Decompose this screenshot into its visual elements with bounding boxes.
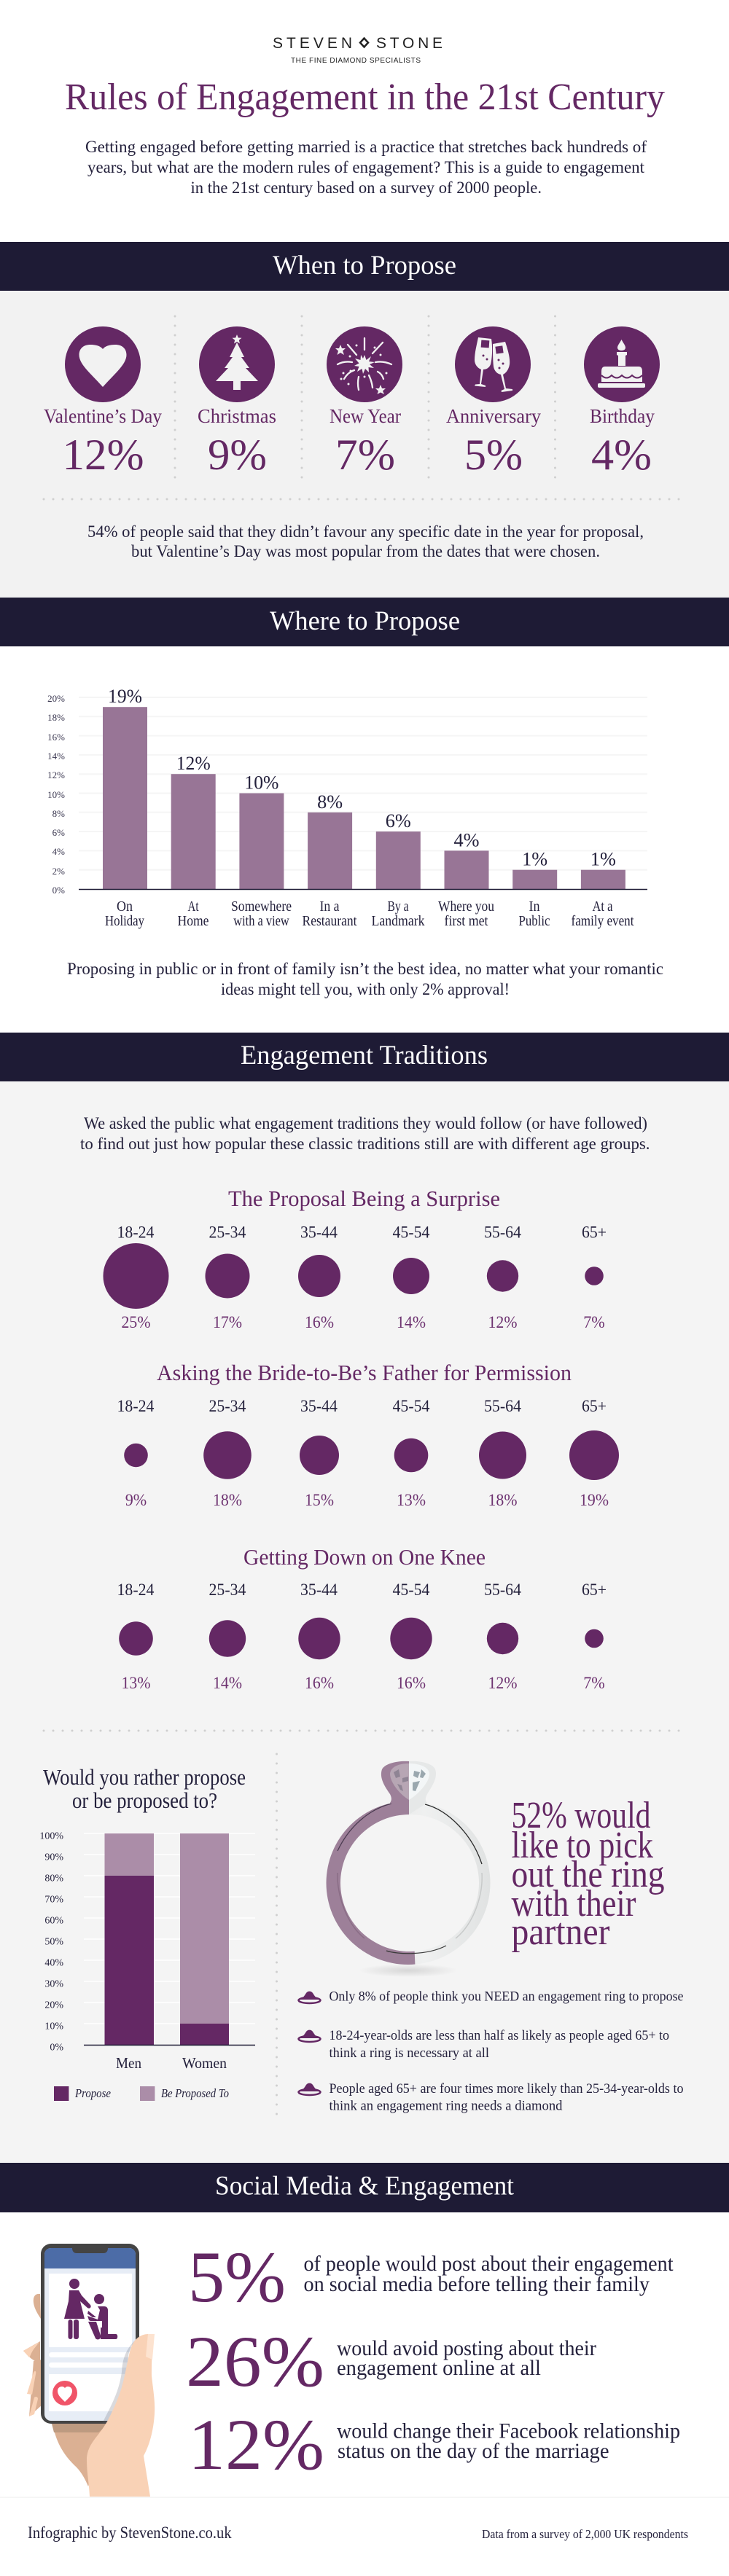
ring callout: partner — [512, 1911, 609, 1953]
bullet text: think a ring is necessary at all — [330, 2045, 489, 2061]
legend: Be Proposed To — [161, 2086, 229, 2100]
bullet icon — [299, 2030, 321, 2042]
bubble chart: proposal being a surprise: 16% — [305, 1313, 334, 1331]
bar chart: where to propose: 16% — [47, 732, 65, 743]
labels and values: 5% — [464, 431, 523, 479]
bubble chart: proposal being a surprise: 45-54 — [392, 1223, 430, 1242]
icon: birthday cake — [584, 326, 660, 402]
stacked bar chart: propose or be proposed to: 60% — [44, 1915, 63, 1927]
bubble chart: proposal being a surprise: 25-34 — [208, 1223, 246, 1242]
bubble chart: asking father for permission: 18% — [213, 1491, 242, 1509]
bullet text: Only 8% of people think you NEED an engagement ring to propose — [330, 1989, 684, 2004]
stat: 5 percent: 5% — [188, 2236, 286, 2317]
logo: STONE — [376, 35, 443, 52]
bubble chart: proposal being a surprise — [104, 1186, 607, 1331]
bubble chart: proposal being a surprise: 35-44 — [300, 1223, 338, 1242]
heading: when to propose — [0, 242, 729, 291]
intro text: years, but what are the modern rules of engagement? This is a guide to engagement — [87, 158, 645, 176]
ring callout: like to pick — [512, 1825, 653, 1866]
heading: social media and engagement — [0, 2163, 729, 2212]
bubble chart: getting down on one knee: 18-24 — [117, 1581, 155, 1599]
legend — [54, 2086, 229, 2101]
stacked bar chart: propose or be proposed to: or be proposed to? — [72, 1788, 217, 1813]
bar chart: where to propose: 12% — [47, 770, 65, 780]
icon: heart — [65, 326, 141, 402]
labels and values: Christmas — [198, 405, 276, 427]
logo: THE FINE DIAMOND SPECIALISTS — [291, 57, 421, 65]
when to propose note: 54% of people said that they didn’t favour any specific date in the year for proposal, — [87, 522, 644, 541]
stacked bar chart: propose or be proposed to: 20% — [44, 2000, 63, 2011]
bar chart: where to propose: In — [529, 899, 539, 915]
footer source: Data from a survey of 2,000 UK respondents — [482, 2527, 688, 2541]
bubble chart: asking father for permission: 9% — [125, 1491, 147, 1509]
bar chart: where to propose: Where you — [438, 899, 494, 915]
bubble chart: asking father for permission: 15% — [305, 1491, 334, 1509]
bubble chart: getting down on one knee: 16% — [397, 1674, 426, 1692]
phone — [41, 2244, 139, 2424]
bar chart: where to propose: 8% — [317, 791, 343, 813]
stacked bar chart: propose or be proposed to: Would you rather propose — [43, 1764, 246, 1790]
bubble chart: asking father for permission: 13% — [397, 1491, 426, 1509]
bubble chart: asking father for permission — [117, 1360, 619, 1509]
stacked bar chart: propose or be proposed to: 50% — [44, 1937, 63, 1947]
labels and values: 12% — [63, 431, 144, 479]
bubble chart: proposal being a surprise: 65+ — [582, 1223, 607, 1242]
icon: like heart — [52, 2381, 77, 2405]
bar chart: where to propose: In a — [319, 899, 340, 915]
stat: 12 percent — [188, 2404, 680, 2485]
bubble chart: getting down on one knee: 65+ — [582, 1581, 607, 1599]
logo — [273, 35, 443, 65]
bubble chart: proposal being a surprise: 25% — [121, 1313, 150, 1331]
bar chart: where to propose: 2% — [52, 866, 65, 877]
when to propose note — [87, 522, 644, 560]
bullet text — [330, 2028, 669, 2061]
traditions intro: We asked the public what engagement traditions they would follow (or have followed) — [84, 1114, 647, 1132]
ring illustration — [327, 1761, 490, 1977]
heading: when to propose: When to Propose — [273, 251, 456, 281]
stat: 26 percent: engagement online at all — [337, 2356, 541, 2380]
bubble chart: getting down on one knee: 13% — [121, 1674, 150, 1692]
bar chart: where to propose: 12% — [176, 753, 211, 774]
bar chart: where to propose: 4% — [52, 846, 65, 857]
bar chart: where to propose: At — [188, 899, 199, 915]
bubble chart: getting down on one knee: 35-44 — [300, 1581, 338, 1599]
ring callout: with their — [512, 1883, 636, 1925]
ring callout — [512, 1795, 665, 1953]
heading: engagement traditions — [0, 1033, 729, 1081]
bullet icon — [299, 2083, 321, 2095]
icon: hand holding phone — [23, 2244, 155, 2497]
stat: 5 percent: of people would post about their engagement — [303, 2252, 674, 2276]
bullet text: People aged 65+ are four times more likely than 25-34-year-olds to — [330, 2081, 684, 2097]
labels and values: 4% — [591, 431, 652, 479]
labels and values — [44, 405, 655, 479]
bubble chart: proposal being a surprise: 12% — [488, 1313, 518, 1331]
bar chart: where to propose: family event — [572, 913, 634, 929]
stat: 12 percent: status on the day of the marriage — [338, 2439, 609, 2463]
bar chart: where to propose: By a — [388, 899, 409, 915]
when to propose note: but Valentine’s Day was most popular from the dates that were chosen. — [131, 542, 600, 560]
bubble chart: getting down on one knee — [117, 1544, 607, 1692]
bubble chart: asking father for permission: 45-54 — [392, 1397, 430, 1415]
stacked bar chart: propose or be proposed to: 100% — [39, 1831, 63, 1842]
bubble chart: proposal being a surprise: 55-64 — [484, 1223, 521, 1242]
heading: social media and engagement: Social Media & Engagement — [215, 2172, 515, 2201]
stacked bar chart: propose or be proposed to: 0% — [50, 2042, 63, 2054]
bubble chart: asking father for permission: Asking the Bride-to-Be’s Father for Permission — [157, 1360, 572, 1385]
bubble chart: getting down on one knee: 14% — [213, 1674, 242, 1692]
bar chart: where to propose: 1% — [590, 849, 616, 870]
bubble chart: getting down on one knee: 25-34 — [208, 1581, 246, 1599]
bubble chart: getting down on one knee: 7% — [583, 1674, 605, 1692]
bubble chart: proposal being a surprise: 18-24 — [117, 1223, 155, 1242]
bar chart: where to propose: 19% — [108, 686, 142, 707]
logo: STEVEN — [273, 35, 352, 52]
bar chart: where to propose: Holiday — [105, 913, 144, 929]
intro text: in the 21st century based on a survey of 2000 people. — [191, 179, 542, 197]
labels and values: Anniversary — [446, 405, 541, 427]
bar chart: where to propose: with a view — [233, 913, 289, 929]
stacked bar chart: propose or be proposed to: 10% — [44, 2021, 63, 2032]
bar chart: where to propose: 10% — [47, 789, 65, 800]
bubble chart: proposal being a surprise: The Proposal Being a Surprise — [228, 1186, 500, 1211]
ring callout: out the ring — [512, 1854, 665, 1895]
bar chart: where to propose — [47, 686, 647, 929]
bubble chart: asking father for permission: 25-34 — [208, 1397, 246, 1415]
stacked bar chart: propose or be proposed to — [39, 1764, 255, 2101]
legend: Propose — [74, 2086, 111, 2100]
panel: when to propose — [0, 242, 729, 598]
bubble chart: getting down on one knee: 16% — [305, 1674, 334, 1692]
bar chart: where to propose: On — [117, 899, 133, 915]
bar chart: where to propose: Landmark — [372, 913, 424, 929]
bar chart: where to propose: Public — [519, 913, 550, 929]
stat: 26 percent — [186, 2321, 596, 2402]
bar chart: where to propose: 14% — [47, 751, 65, 762]
bubble chart: asking father for permission: 65+ — [582, 1397, 607, 1415]
traditions intro: to find out just how popular these classic traditions still are with different age groups. — [80, 1135, 650, 1153]
bubble chart: getting down on one knee: 45-54 — [392, 1581, 430, 1599]
labels and values: 7% — [335, 431, 395, 479]
stat: 12 percent: 12% — [188, 2404, 324, 2485]
bullet list — [299, 1989, 684, 2113]
footer credit: Infographic by StevenStone.co.uk — [28, 2524, 232, 2542]
bubble chart: getting down on one knee: Getting Down on One Knee — [243, 1544, 486, 1570]
heading: where to propose: Where to Propose — [270, 606, 460, 636]
bar chart: where to propose: Restaurant — [302, 913, 357, 929]
bubble chart: asking father for permission: 55-64 — [484, 1397, 521, 1415]
labels and values: Valentine’s Day — [44, 405, 162, 427]
bubble chart: proposal being a surprise: 14% — [397, 1313, 426, 1331]
bubble chart: getting down on one knee: 55-64 — [484, 1581, 521, 1599]
stat: 26 percent: would avoid posting about their — [337, 2336, 596, 2360]
where to propose note — [67, 960, 663, 998]
bar chart: where to propose: Home — [178, 913, 209, 929]
where to propose note: ideas might tell you, with only 2% approval! — [221, 980, 510, 998]
bar chart: where to propose: 6% — [52, 827, 65, 838]
bar chart: where to propose: 0% — [52, 885, 65, 896]
panel: engagement traditions — [0, 1033, 729, 2163]
bubble chart: asking father for permission: 19% — [580, 1491, 609, 1509]
bubble chart: proposal being a surprise: 7% — [583, 1313, 605, 1331]
title: Rules of Engagement in the 21st Century — [65, 77, 665, 118]
bar chart: where to propose: 1% — [522, 849, 547, 870]
where to propose note: Proposing in public or in front of family isn’t the best idea, no matter what your romantic — [67, 960, 663, 978]
stacked bar chart: propose or be proposed to: 30% — [44, 1979, 63, 1989]
heading: engagement traditions: Engagement Traditions — [241, 1041, 488, 1070]
heading: where to propose — [0, 598, 729, 646]
traditions intro — [80, 1114, 650, 1153]
bubble chart: asking father for permission: 18-24 — [117, 1397, 155, 1415]
bar chart: where to propose: 20% — [47, 693, 65, 704]
bubble chart: proposal being a surprise: 17% — [213, 1313, 242, 1331]
bullet text: 18-24-year-olds are less than half as likely as people aged 65+ to — [330, 2028, 669, 2043]
bullet text — [330, 2081, 684, 2113]
stacked bar chart: propose or be proposed to: 90% — [44, 1852, 63, 1863]
bubble chart: getting down on one knee: 12% — [488, 1674, 518, 1692]
intro text: Getting engaged before getting married is a practice that stretches back hundreds of — [85, 138, 647, 156]
stat: 12 percent: would change their Facebook relationship — [337, 2419, 680, 2443]
stat: 26 percent: 26% — [186, 2321, 324, 2402]
icon: fireworks — [327, 326, 402, 402]
stat: 5 percent: on social media before telling their family — [303, 2272, 650, 2296]
bullet icon — [299, 1992, 321, 2003]
bar chart: where to propose: 6% — [386, 810, 411, 831]
bar chart: where to propose: 4% — [453, 829, 480, 850]
labels and values: Birthday — [590, 405, 655, 427]
bubble chart: asking father for permission: 35-44 — [300, 1397, 338, 1415]
stacked bar chart: propose or be proposed to: 40% — [44, 1957, 63, 1969]
stacked bar chart: propose or be proposed to: Men — [116, 2054, 141, 2072]
bubble chart: asking father for permission: 18% — [488, 1491, 518, 1509]
bar chart: where to propose: Somewhere — [231, 899, 292, 915]
icon: proposing couple — [64, 2279, 117, 2339]
intro text — [85, 138, 647, 197]
labels and values: New Year — [330, 405, 401, 427]
icon: christmas tree — [199, 326, 275, 402]
stacked bar chart: propose or be proposed to: 70% — [44, 1895, 63, 1905]
stacked bar chart: propose or be proposed to: 80% — [44, 1873, 63, 1884]
icon: champagne glasses — [455, 326, 531, 402]
bar chart: where to propose: first met — [445, 913, 488, 929]
bar chart: where to propose: At a — [592, 899, 613, 915]
stacked bar chart: propose or be proposed to: Women — [182, 2054, 227, 2072]
bar chart: where to propose: 10% — [244, 772, 278, 793]
bar chart: where to propose: 8% — [52, 808, 65, 819]
labels and values: 9% — [208, 431, 267, 479]
bar chart: where to propose: 18% — [47, 712, 65, 723]
ring callout: 52% would — [512, 1795, 650, 1836]
thumb — [87, 2334, 155, 2497]
bullet text: think an engagement ring needs a diamond — [330, 2099, 563, 2113]
stat: 5 percent — [188, 2236, 674, 2317]
